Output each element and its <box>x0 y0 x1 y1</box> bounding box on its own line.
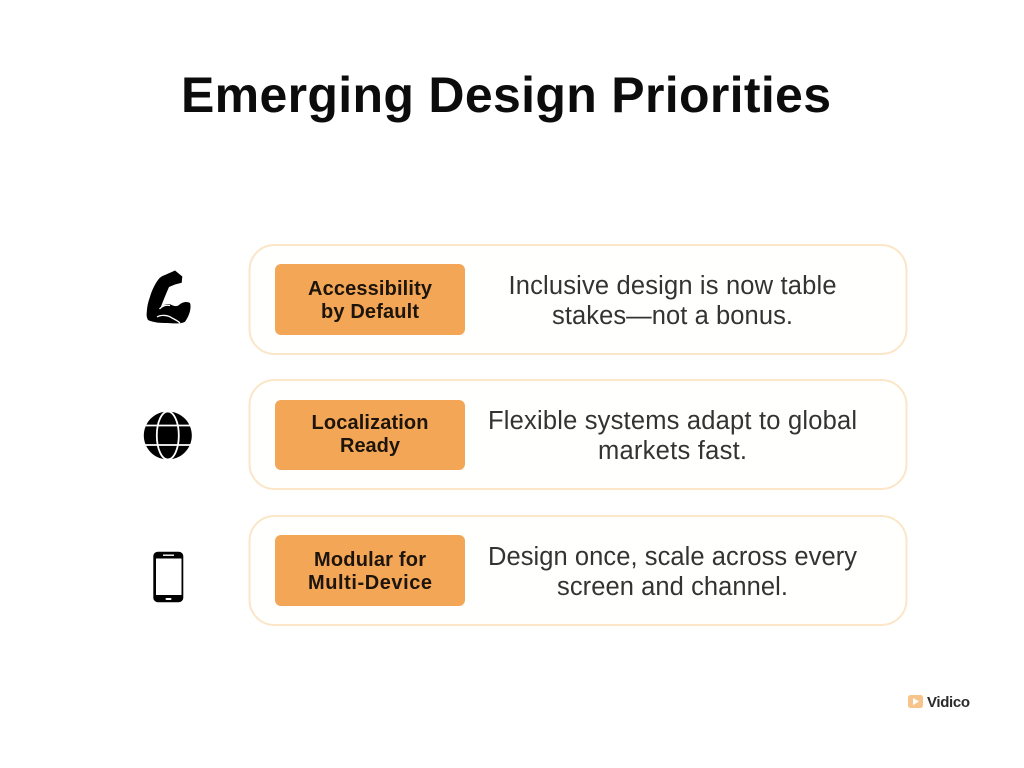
description: modular <box>488 543 857 601</box>
badge: localization ready <box>275 400 465 470</box>
icon: smartphone <box>153 552 183 602</box>
badge: accessibility by default <box>275 264 465 335</box>
badge: localization ready: Ready <box>340 435 401 457</box>
description: modular: screen and channel. <box>557 573 788 601</box>
description: modular: Design once, scale across every <box>488 543 857 571</box>
badge: modular for multi-device: Modular for <box>314 549 426 571</box>
badge: modular for multi-device <box>275 535 465 606</box>
icon: globe <box>143 412 193 460</box>
description: accessibility: Inclusive design is now table <box>508 272 836 300</box>
badge: modular for multi-device: Multi-Device <box>308 572 432 594</box>
logo: Vidico: Vidico <box>927 694 970 711</box>
badge: accessibility by default: by Default <box>321 301 419 323</box>
logo: Vidico <box>908 694 970 711</box>
badge: localization ready: Localization <box>312 412 428 434</box>
description: localization <box>488 407 857 465</box>
badge: accessibility by default: Accessibility <box>308 278 433 300</box>
title: Emerging Design Priorities <box>181 67 831 123</box>
description: accessibility: stakes—not a bonus. <box>552 302 793 330</box>
description: localization: markets fast. <box>598 437 747 465</box>
panel: modular for multi-device <box>250 516 906 625</box>
panel: localization ready <box>250 380 906 489</box>
panel: accessibility by default <box>250 245 906 354</box>
description: localization: Flexible systems adapt to global <box>488 407 857 435</box>
icon: flexed arm <box>147 270 191 323</box>
description: accessibility <box>508 272 836 330</box>
